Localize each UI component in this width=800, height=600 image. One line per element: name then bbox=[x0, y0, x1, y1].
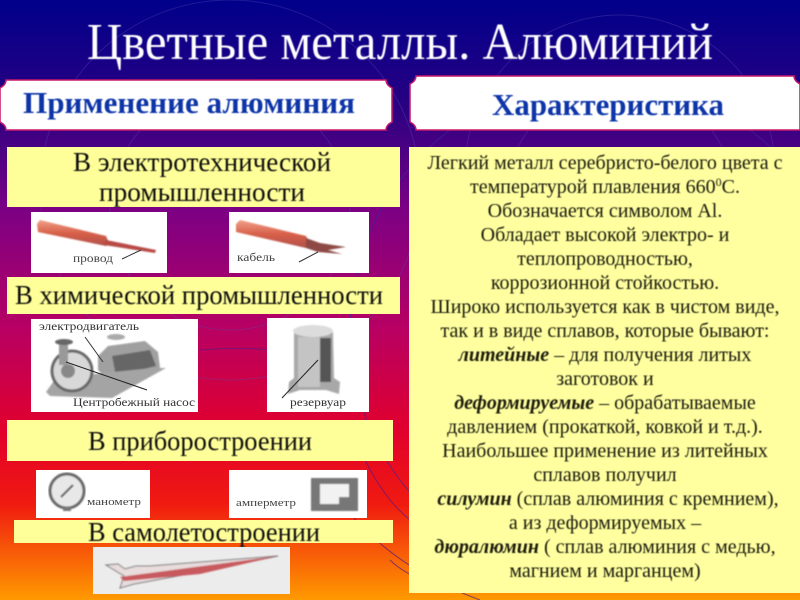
icon: aircraft bbox=[106, 556, 278, 588]
title: Цветные металлы. Алюминий bbox=[87, 14, 713, 71]
panel: instrument making label: В приборостроении bbox=[88, 426, 312, 456]
icon: manometer bbox=[50, 474, 84, 511]
panel: electrical industry label: В электротехнической bbox=[73, 147, 331, 177]
panel: characteristics text: Обозначается символом Al. bbox=[488, 200, 722, 222]
panel: characteristics text: деформируемые – обрабатываемые bbox=[454, 392, 756, 414]
icon: wire bbox=[37, 220, 156, 253]
icon: cable bbox=[236, 220, 346, 254]
panel: application header bbox=[0, 80, 392, 130]
panel: characteristics text: так и в виде сплавов, которые бывают: bbox=[441, 320, 769, 342]
panel: characteristics text: Легкий металл серебристо-белого цвета с bbox=[427, 152, 783, 174]
panel: characteristics text bbox=[409, 147, 800, 593]
panel: characteristics text: силумин (сплав алюминия с кремнием), bbox=[437, 488, 779, 510]
panel: pump image bbox=[31, 319, 198, 412]
panel: aircraft image bbox=[93, 547, 290, 594]
panel: reservoir image: резервуар bbox=[290, 397, 346, 409]
panel: characteristics text: температурой плавления 660 bbox=[470, 176, 716, 198]
panel: characteristics text: Наибольшее применение из литейных bbox=[442, 440, 768, 462]
icon: reservoir bbox=[288, 325, 340, 394]
panel: reservoir image bbox=[267, 318, 369, 412]
panel: characteristics text: магнием и марганцем) bbox=[509, 560, 701, 582]
panel: instrument making label bbox=[7, 420, 393, 461]
panel: characteristics text: сплавов получил bbox=[533, 464, 677, 486]
panel: characteristics text: дюралюмин ( сплав алюминия с медью, bbox=[434, 536, 776, 558]
panel: wire image: провод bbox=[73, 253, 113, 265]
panel: wire image bbox=[31, 212, 167, 273]
panel: cable image bbox=[229, 212, 369, 273]
panel: ammeter image bbox=[229, 470, 367, 518]
panel: characteristics text: коррозионной стойкостью. bbox=[491, 272, 719, 294]
panel: electrical industry label bbox=[7, 147, 400, 207]
panel: characteristics text: а из деформируемых – bbox=[509, 512, 702, 534]
panel: characteristics text: литейные – для получения литых bbox=[458, 344, 751, 366]
panel: electrical industry label: промышленности bbox=[99, 177, 305, 207]
panel: characteristics text: Широко используется как в чистом виде, bbox=[431, 296, 779, 318]
panel: aircraft label bbox=[14, 517, 393, 547]
panel: characteristics text: С. bbox=[722, 176, 740, 198]
panel: characteristics header bbox=[410, 76, 800, 130]
panel: chemical industry label: В химической промышленности bbox=[15, 280, 383, 310]
heading: application: Применение алюминия bbox=[23, 85, 355, 120]
panel: characteristics text: 0 bbox=[716, 175, 722, 189]
panel: characteristics text: давлением (прокаткой, ковкой и т.д.). bbox=[447, 416, 763, 438]
panel: manometer image bbox=[36, 470, 150, 518]
panel: characteristics text: теплопроводностью, bbox=[517, 248, 693, 270]
icon: ammeter bbox=[311, 478, 358, 511]
panel: manometer image: манометр bbox=[87, 496, 142, 508]
panel: characteristics text: заготовок и bbox=[556, 368, 654, 390]
panel: pump image: электродвигатель bbox=[39, 321, 139, 333]
icon: motor and pump bbox=[46, 334, 166, 398]
panel: pump image: Центробежный насос bbox=[73, 397, 195, 409]
panel: aircraft label: В самолетостроении bbox=[88, 517, 320, 547]
heading: characteristics: Характеристика bbox=[492, 87, 724, 122]
panel: cable image: кабель bbox=[237, 252, 275, 264]
panel: characteristics text: Обладает высокой электро- и bbox=[481, 224, 730, 246]
panel: ammeter image: амперметр bbox=[236, 497, 297, 509]
